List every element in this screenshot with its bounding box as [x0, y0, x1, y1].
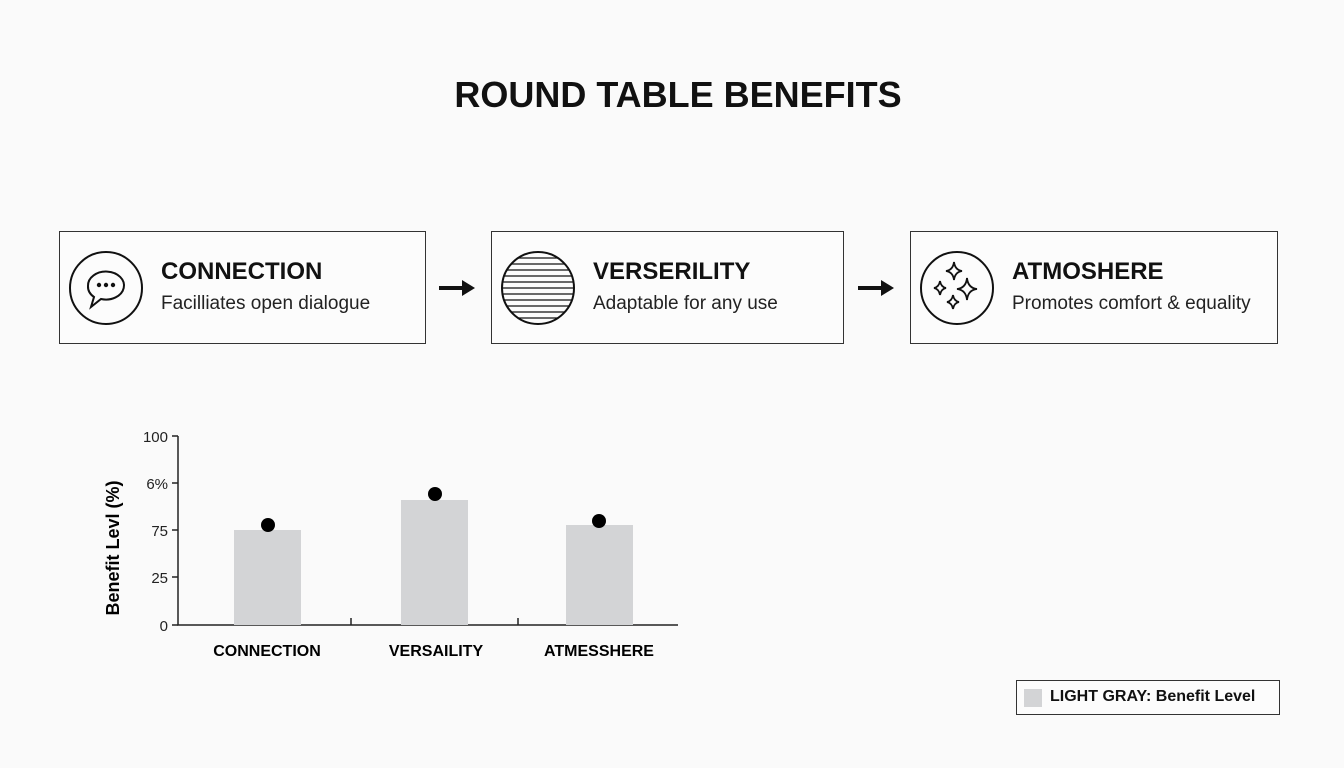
heading: CONNECTION [161, 258, 322, 285]
x labels: CONNECTION [213, 643, 321, 660]
heading: ATMOSHERE [1012, 258, 1164, 285]
legend [1016, 680, 1280, 715]
chart: 75 [151, 523, 168, 540]
chart: 25 [151, 570, 168, 587]
text: Promotes comfort & equality [1012, 293, 1251, 314]
arrow [439, 280, 475, 296]
x labels: VERSAILITY [389, 643, 483, 660]
panel: atmosphere [910, 231, 1278, 344]
bars [234, 500, 633, 625]
heading: VERSERILITY [593, 258, 750, 285]
title: ROUND TABLE BENEFITS [454, 74, 902, 115]
arrow [858, 280, 894, 296]
panel: versatility [491, 231, 844, 344]
x labels: ATMESSHERE [544, 643, 654, 660]
legend: LIGHT GRAY: Benefit Level [1050, 688, 1255, 705]
chart: 6% [146, 476, 168, 493]
panel: connection [59, 231, 426, 344]
text: Facilliates open dialogue [161, 293, 370, 314]
chart: 100 [143, 429, 168, 446]
icon: speech bubble [69, 251, 143, 325]
icon: striped circle [501, 251, 575, 325]
icon: sparkles [920, 251, 994, 325]
chart: 0 [160, 618, 168, 635]
y-axis label: Benefit Levl (%) [103, 480, 123, 616]
dots [261, 487, 606, 532]
text: Adaptable for any use [593, 293, 778, 314]
x labels [213, 643, 654, 660]
